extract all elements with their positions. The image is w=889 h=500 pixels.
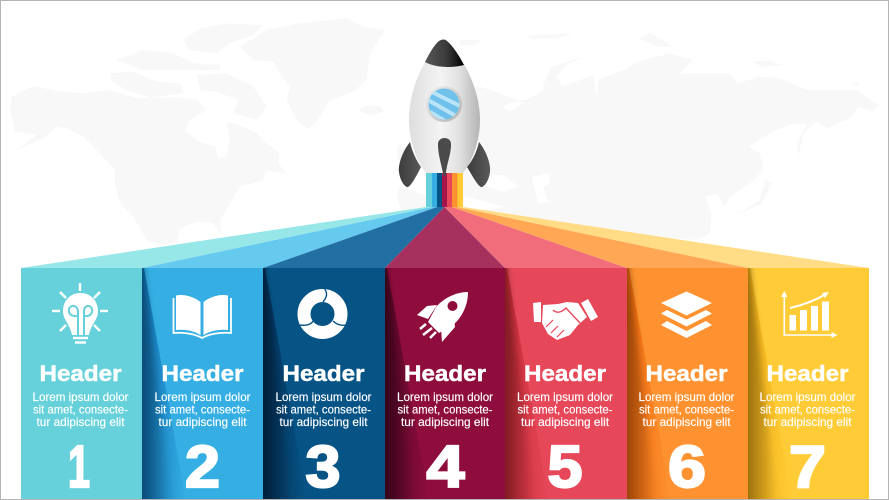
text block 2: Lorem ipsum dolor (154, 390, 251, 404)
world map (10, 18, 878, 245)
text block 3: sit amet, consecte- (276, 402, 371, 416)
text block 3: Lorem ipsum dolor (276, 390, 372, 404)
number 3: 3 (306, 434, 340, 500)
number 1: 1 (68, 434, 90, 500)
text block 5 (517, 390, 613, 429)
panel: column 7 (742, 262, 869, 500)
text block 4: sit amet, consecte- (398, 402, 492, 416)
rocket exhaust stripes (426, 172, 463, 207)
text block 5: tur adipiscing elit (521, 415, 610, 429)
text block 7: sit amet, consecte- (760, 402, 855, 416)
text block 1: tur adipiscing elit (36, 415, 125, 429)
number 6: 6 (668, 434, 706, 500)
panel: column 1 (21, 268, 142, 500)
number 2: 2 (185, 434, 220, 500)
panel: column 6 (621, 262, 748, 500)
text block 7: tur adipiscing elit (764, 415, 852, 429)
icon: book (174, 295, 231, 338)
text block 2 (154, 390, 251, 429)
icon: small rocket (417, 292, 468, 342)
text block 3 (276, 390, 372, 429)
number 4: 4 (426, 434, 465, 500)
text block 6: Lorem ipsum dolor (638, 390, 735, 404)
text block 3: tur adipiscing elit (280, 415, 368, 429)
number 7: 7 (789, 434, 826, 500)
panel: column 3 (257, 262, 385, 500)
icon: cycle ring (300, 288, 348, 332)
header 5: Header (524, 361, 606, 386)
header 6: Header (646, 361, 728, 386)
number 5: 5 (548, 434, 582, 500)
text block 4 (397, 390, 493, 429)
text block 1 (32, 390, 129, 429)
header 3: Header (282, 361, 365, 386)
text block 6: tur adipiscing elit (642, 415, 731, 429)
icon: layers (661, 292, 712, 338)
text block 1: Lorem ipsum dolor (32, 390, 129, 404)
icon: handshake (533, 299, 598, 340)
header 7: Header (766, 361, 849, 386)
header 4: Header (404, 361, 486, 386)
header 1: Header (40, 361, 122, 386)
text block 5: Lorem ipsum dolor (517, 390, 613, 404)
text block 5: sit amet, consecte- (518, 402, 612, 416)
text block 6 (638, 390, 735, 429)
icon: rocket (399, 40, 490, 187)
text block 2: sit amet, consecte- (155, 402, 250, 416)
header 2: Header (162, 361, 244, 386)
text block 7: Lorem ipsum dolor (760, 390, 856, 404)
panel: column 2 (136, 262, 263, 500)
icon: light bulb (52, 283, 108, 342)
panel: column 5 (499, 262, 627, 500)
text block 2: tur adipiscing elit (158, 415, 247, 429)
text block 6: sit amet, consecte- (639, 402, 734, 416)
panel: column 4 (379, 262, 505, 500)
text block 4: Lorem ipsum dolor (397, 390, 493, 404)
text block 1: sit amet, consecte- (33, 402, 128, 416)
icon: growth chart (781, 291, 838, 338)
text block 4: tur adipiscing elit (401, 415, 490, 429)
panel: column top fans (21, 207, 869, 268)
text block 7 (760, 390, 856, 429)
